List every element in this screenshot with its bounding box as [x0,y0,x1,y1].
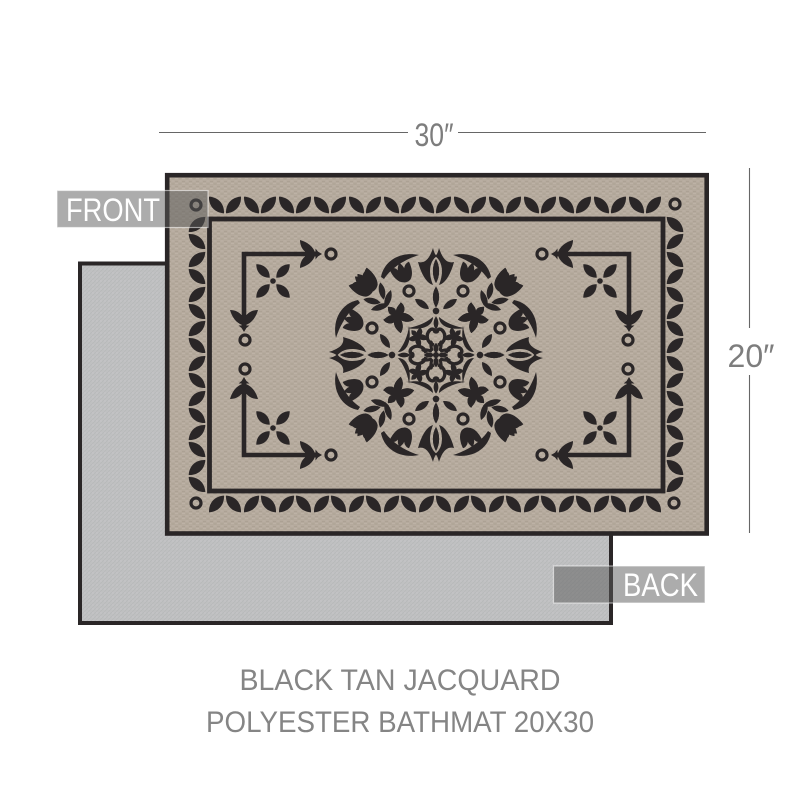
corner brackets [230,240,643,469]
front mat [167,175,707,533]
product title: POLYESTER BATHMAT 20X30 [206,706,594,739]
back label: BACK [623,567,698,603]
product title [206,664,594,739]
bottom leaf border [205,492,665,516]
right leaf border [663,213,687,496]
corner rings [191,199,680,508]
left leaf border [185,213,209,496]
width dimension: 30 inches: 30″ [414,117,454,153]
top leaf border [205,193,665,217]
front label: FRONT [66,192,160,228]
back label [554,566,705,603]
height dimension: 20 inches: 20″ [728,338,774,374]
back mat [80,264,611,623]
central medallion [329,248,543,462]
product title: BLACK TAN JACQUARD [240,664,560,697]
